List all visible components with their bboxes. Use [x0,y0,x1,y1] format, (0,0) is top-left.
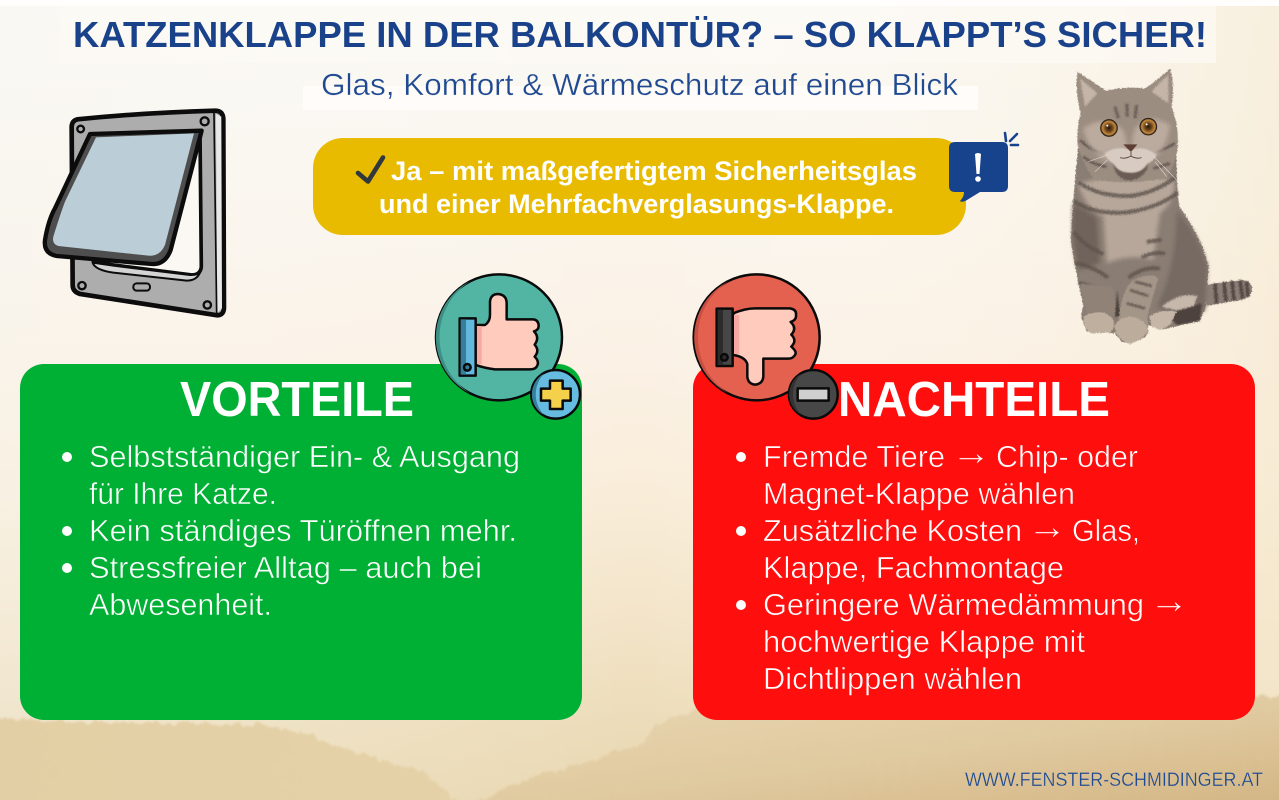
cat muzzle [1105,148,1157,173]
cat eyes [1101,120,1117,136]
list: Nachteile: Magnet-Klappe wählen [763,476,1075,511]
cat body [1071,143,1209,344]
icon: cat photo [1071,68,1252,344]
list: Nachteile: → [1149,580,1189,622]
callout: answer pill [313,138,966,235]
panel: Nachteile [693,364,1255,720]
title: KATZENKLAPPE IN DER BALKONTÜR? – SO KLAPPT’S SICHER! [73,14,1207,55]
heading: Vorteile: VORTEILE [180,373,414,427]
icon: speech bubble with exclamation mark [949,133,1018,202]
list: Nachteile: Zusätzliche Kosten [763,513,1022,548]
callout text: und einer Mehrfachverglasungs-Klappe. [379,189,894,219]
list: Vorteile: Abwesenheit. [89,587,272,622]
callout text: Ja – mit maßgefertigtem Sicherheitsglas [391,156,917,186]
list: Nachteile: Chip- oder [996,439,1138,474]
list: Nachteile: → [951,432,991,474]
list: Vorteile: für Ihre Katze. [89,476,277,511]
list: Vorteile: Selbstständiger Ein- & Ausgang [89,439,520,474]
title band [60,6,1216,63]
cat whiskers [1088,155,1177,180]
cat stripes [1075,178,1177,292]
list: Nachteile: Glas, [1072,513,1140,548]
icon: thumbs down [694,274,838,419]
cat nose [1123,144,1137,152]
cat front leg [1115,275,1158,343]
icon: cat flap [45,111,224,315]
list: Vorteile [62,439,520,622]
cat head [1077,68,1178,182]
list: Nachteile: hochwertige Klappe mit [763,624,1085,659]
cat chin [1113,165,1148,181]
list: Nachteile: Klappe, Fachmontage [763,550,1064,585]
list: Nachteile: Fremde Tiere [763,439,945,474]
cat tail [1205,280,1252,306]
icon: check mark [358,158,383,182]
cat paws [1114,317,1148,344]
heading: Nachteile: NACHTEILE [838,373,1110,427]
footer: website: WWW.FENSTER-SCHMIDINGER.AT [965,770,1263,791]
callout text [379,156,917,219]
icon: thumbs up [436,274,580,419]
list: Nachteile: → [1027,506,1067,548]
list: Nachteile: Dichtlippen wählen [763,661,1022,696]
list: Vorteile: Stressfreier Alltag – auch bei [89,550,482,585]
list: Vorteile: Kein ständiges Türöffnen mehr. [89,513,517,548]
subtitle: Glas, Komfort & Wärmeschutz auf einen Blick [321,68,959,102]
list: Nachteile [736,432,1189,696]
panel: Vorteile [20,364,582,720]
list: Nachteile: Geringere Wärmedämmung [763,587,1144,622]
cat left leg and shadows [1080,283,1117,317]
subtitle band [303,86,978,110]
